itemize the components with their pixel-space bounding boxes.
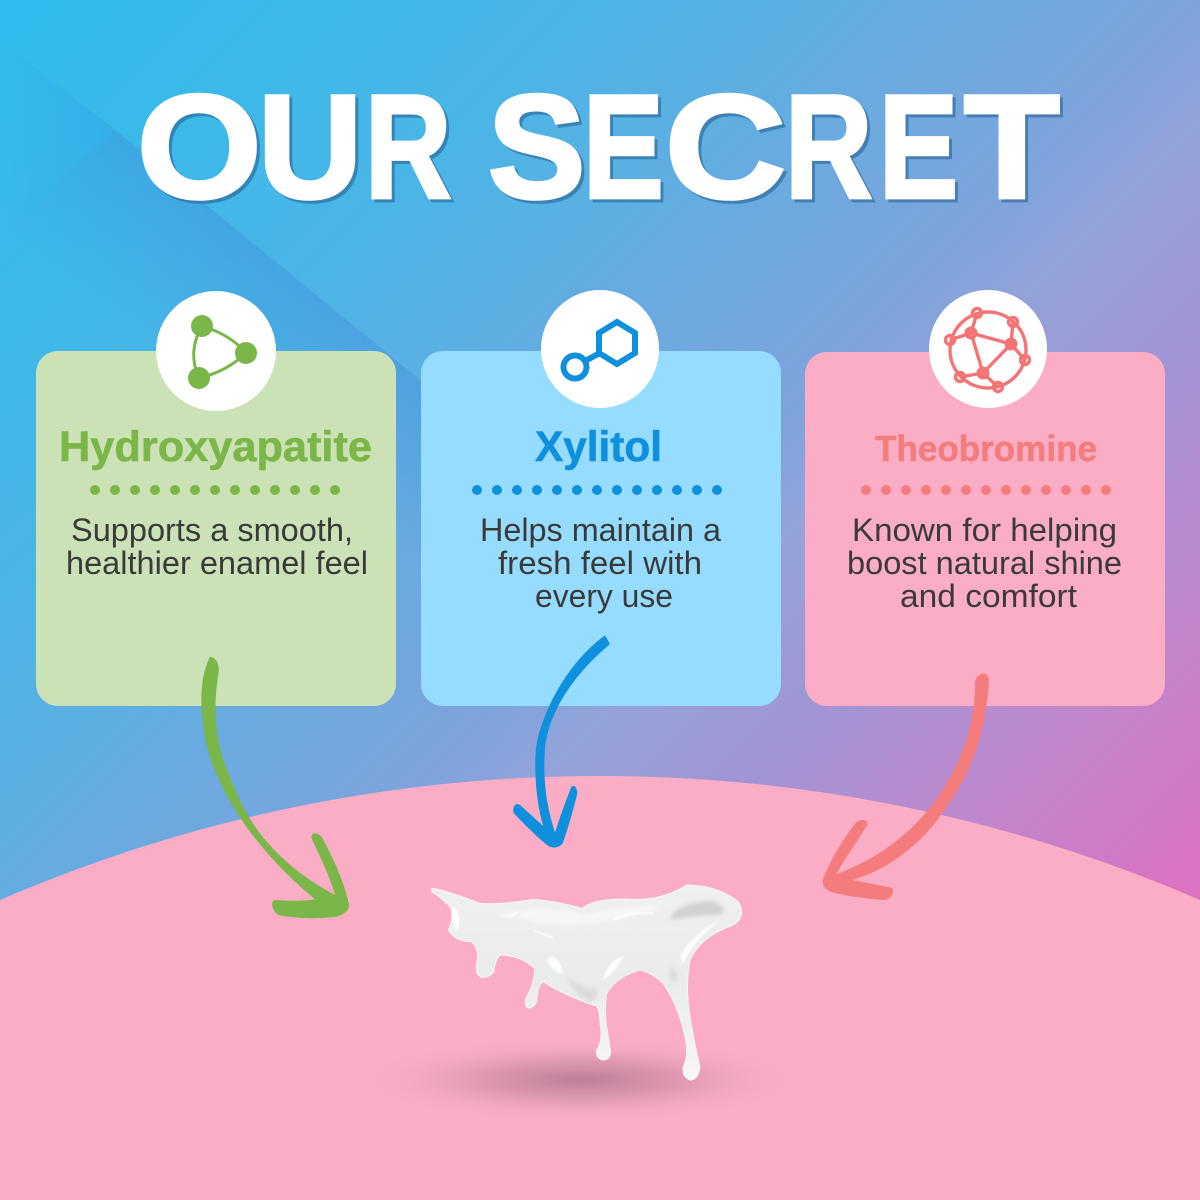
title: C <box>665 64 786 229</box>
title: R <box>365 64 451 229</box>
icon: xylitol molecule <box>541 290 659 408</box>
title: S <box>488 64 586 229</box>
title: E <box>583 64 663 229</box>
dotted divider blue <box>477 485 718 495</box>
arrow: coral <box>823 673 989 900</box>
heading: Hydroxyapatite: Hydroxyapatite <box>59 423 372 471</box>
icon: hydroxyapatite molecule <box>156 291 276 411</box>
panel: Xylitol <box>421 290 781 706</box>
title: E <box>879 64 958 229</box>
text: theobromine description: Known for helping <box>852 512 1117 548</box>
title: R <box>785 64 872 229</box>
text: xylitol description: Helps maintain a <box>480 512 721 548</box>
shadow beneath milk <box>360 1038 800 1122</box>
heading: Xylitol: Xylitol <box>535 423 662 471</box>
dotted divider green <box>95 485 336 495</box>
text: theobromine description: boost natural shine <box>847 545 1122 581</box>
arrow: blue <box>513 635 610 847</box>
panel: Hydroxyapatite <box>36 291 396 706</box>
title <box>137 64 1063 229</box>
icon: theobromine molecule <box>929 290 1047 408</box>
arrow: green <box>201 657 349 918</box>
text: theobromine description <box>847 512 1122 614</box>
pink hill <box>0 776 1200 1200</box>
dotted divider pink <box>866 485 1107 495</box>
illustration: milk splash <box>432 885 742 1080</box>
text: xylitol description: every use <box>535 578 673 614</box>
text: hydroxyapatite description: Supports a smooth, <box>71 512 353 548</box>
text: xylitol description <box>480 512 721 614</box>
text: hydroxyapatite description: healthier enamel feel <box>66 545 368 581</box>
text: hydroxyapatite description <box>66 512 368 581</box>
panel: Theobromine <box>805 290 1165 706</box>
heading: Theobromine: Theobromine <box>875 428 1097 469</box>
title: T <box>964 64 1060 229</box>
text: theobromine description: and comfort <box>900 578 1077 614</box>
text: xylitol description: fresh feel with <box>498 545 702 581</box>
title: U <box>258 64 363 229</box>
title: O <box>137 64 261 229</box>
